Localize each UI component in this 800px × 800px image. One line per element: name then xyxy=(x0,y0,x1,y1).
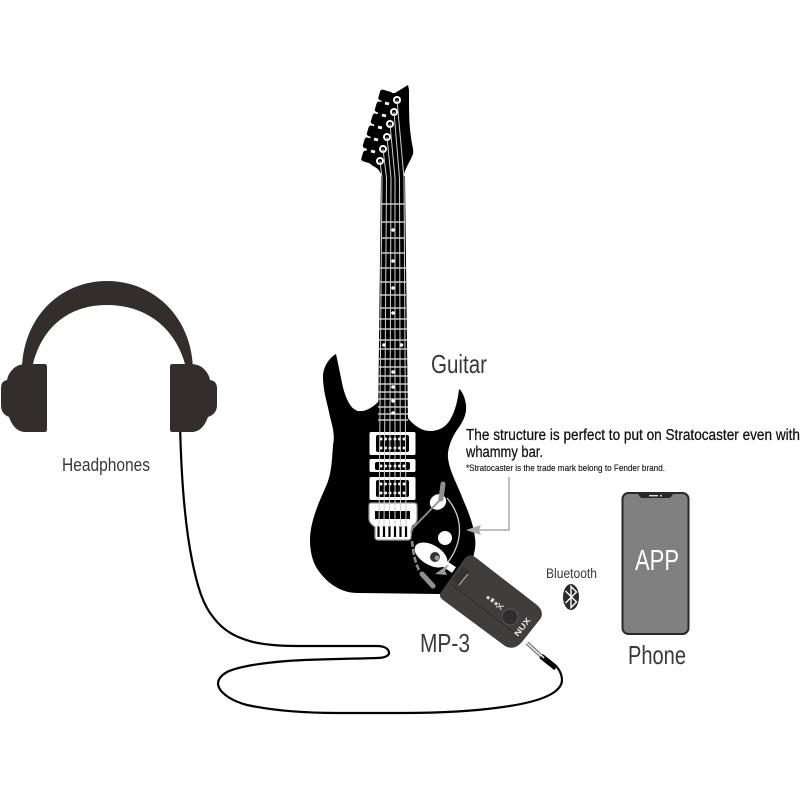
guitar illustration xyxy=(310,85,475,594)
headphone jack plug xyxy=(527,643,556,668)
arrow: callout to whammy bar xyxy=(466,477,509,535)
connection arrow xyxy=(435,564,449,575)
icon: headphones xyxy=(1,281,217,432)
strings xyxy=(379,100,406,527)
NUX logo: NUX xyxy=(512,615,533,638)
pickup pole dots xyxy=(380,438,406,494)
cable: headphones to MP-3 xyxy=(180,423,562,713)
pickups xyxy=(370,432,416,500)
volume knob xyxy=(427,491,449,513)
device: MP-3 xyxy=(440,555,542,648)
tuner posts xyxy=(377,97,400,164)
output jack plate xyxy=(410,537,452,573)
label: Phone: Phone xyxy=(628,640,686,670)
label: Guitar: Guitar xyxy=(431,349,487,379)
status icons xyxy=(486,596,504,610)
fret inlays xyxy=(382,228,403,415)
headstock xyxy=(364,85,413,178)
callout text: whammy bar. xyxy=(465,444,543,461)
left ear cup xyxy=(1,364,47,432)
label: MP-3: MP-3 xyxy=(420,628,470,658)
callout text: *Stratocaster is the trade mark belong to Fender brand. xyxy=(466,463,665,473)
callout text xyxy=(465,427,800,473)
housing seam xyxy=(451,584,520,637)
frets xyxy=(378,204,408,420)
whammy lower dashed sweep xyxy=(412,541,419,570)
bridge xyxy=(369,503,417,540)
tuner shafts xyxy=(371,103,389,152)
icon: phone xyxy=(622,493,688,634)
tone knob xyxy=(438,531,452,545)
plugged connector xyxy=(430,552,454,570)
device knob xyxy=(502,609,518,625)
icon: Bluetooth xyxy=(563,584,579,610)
tuner pegs xyxy=(361,89,393,164)
device housing xyxy=(440,555,542,648)
guitar body xyxy=(310,354,475,594)
whammy bar sweep arc xyxy=(447,498,460,562)
label: Headphones: Headphones xyxy=(62,455,150,475)
app label: APP xyxy=(635,545,679,577)
label: Bluetooth: Bluetooth xyxy=(546,565,597,581)
fretboard xyxy=(378,176,408,425)
whammy bar xyxy=(411,484,442,533)
phone notch xyxy=(638,493,673,498)
headband xyxy=(22,281,193,368)
belt clip detail xyxy=(452,566,470,585)
right ear cup xyxy=(170,364,217,432)
